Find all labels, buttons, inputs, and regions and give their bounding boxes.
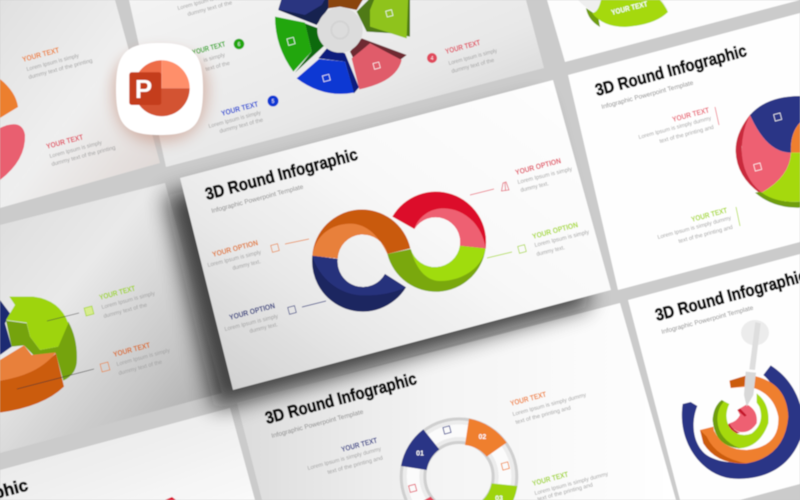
text: red label [638, 105, 719, 145]
text: orange label: Lorem Ipsum is simply [26, 53, 80, 73]
text: red label: Lorem Ipsum is simply dummy [638, 116, 712, 141]
text: red label: Lorem Ipsum is simply [49, 140, 103, 160]
chart: lime half disc [578, 0, 668, 27]
badge: red number [427, 53, 437, 63]
callout: orange option: Lorem Ipsum is simply [207, 250, 262, 269]
leader line: green [47, 313, 79, 321]
leader line: orange [17, 369, 94, 389]
badge: green number [234, 39, 244, 49]
text: navy label [307, 436, 384, 476]
icon: green [84, 306, 94, 316]
text: blue label: YOUR TEXT [220, 99, 260, 118]
callout: navy option [224, 301, 326, 335]
callout: orange option: YOUR OPTION [211, 238, 259, 259]
callout: navy option: dummy text. [249, 322, 279, 335]
text: red label: YOUR TEXT [45, 132, 85, 151]
text: orange label: YOUR TEXT [112, 340, 152, 359]
callout: lime option: dummy text. [536, 245, 566, 258]
text: red label right [444, 39, 497, 73]
chart: numbered donut [401, 419, 517, 500]
segment: navy [312, 256, 406, 312]
callout: lime option: YOUR OPTION [531, 220, 579, 241]
callout: red option: YOUR OPTION [514, 156, 562, 177]
panel: top right slide [547, 0, 800, 62]
text: orange label: text of the printing and [515, 405, 572, 426]
text: green label: text of the [205, 61, 231, 73]
icon: PowerPoint app: P [135, 74, 152, 104]
subtitle: Infographic Powerpoint Template [211, 183, 305, 215]
panel: top left slide [0, 0, 160, 208]
text: lime label [657, 206, 740, 245]
panel: top center slide [129, 0, 544, 167]
text: green label: Lorem Ipsum is simply [101, 291, 156, 311]
text: navy label: YOUR TEXT [340, 436, 379, 454]
title: 3D Round Infographic [203, 145, 360, 204]
chart: 3D pie [0, 297, 77, 413]
text: orange label: Lorem Ipsum is simply [116, 348, 171, 368]
chart: numbered donut: 02 [478, 434, 486, 441]
badge: blue number [268, 96, 278, 106]
panel: right lower slide [628, 254, 800, 500]
text: red label right: dummy text of the [451, 58, 495, 75]
text: green label: YOUR TEXT [191, 39, 227, 57]
chart: orange and red blobs [0, 79, 25, 180]
panel: main slide [180, 80, 611, 390]
callout: lime option: Lorem Ipsum is simply [534, 230, 590, 249]
callout: orange option [207, 238, 309, 272]
text: red label right: Lorem Ipsum is simply [448, 48, 498, 67]
text: orange label: YOUR TEXT [21, 45, 61, 64]
chart: 3D segmented wheel [275, 0, 410, 94]
chart: numbered donut: 01 [416, 451, 424, 458]
segment: red [392, 192, 486, 248]
callout: red option: dummy text. [520, 181, 550, 194]
panel: bottom left slide [0, 408, 255, 500]
title: 3D Round Infographic [263, 369, 419, 428]
text: orange label [112, 342, 170, 375]
text: red label [45, 132, 116, 168]
segment: orange [312, 210, 410, 258]
chart: infinity loop [312, 192, 486, 312]
text: navy label: text of the printing and [327, 455, 384, 476]
text: orange label: Lorem Ipsum is simply dummy [512, 392, 587, 418]
icon: orange [100, 362, 110, 372]
text: orange label [509, 390, 587, 426]
text: lime label: Lorem Ipsum is simply dummy [534, 471, 609, 497]
text: green label: is simply [203, 52, 226, 64]
text: orange label: dummy text of the printing [28, 58, 93, 81]
main slide shadow [165, 100, 590, 410]
text: green label: dummy text of the [103, 302, 148, 320]
text: cropped top copy: dummy text of the [187, 0, 233, 18]
subtitle: Infographic Powerpoint Template [661, 304, 755, 336]
text: blue label [208, 99, 264, 135]
text: blue label: dummy text of the [219, 117, 264, 135]
text: green label [98, 285, 154, 318]
badge: blue number: 5 [272, 99, 275, 105]
text: green label [192, 40, 230, 71]
callout: red option: Lorem Ipsum is simply [517, 167, 573, 186]
text: orange label [21, 45, 93, 81]
callout: orange option: dummy text. [232, 259, 262, 272]
text: red label: YOUR TEXT [671, 105, 711, 124]
text: lime label: YOUR TEXT [690, 206, 729, 224]
chart fragment: red tip [165, 497, 176, 500]
badge: red number: 4 [431, 56, 434, 62]
chart: concentric target with dart [682, 320, 800, 479]
callout: lime option [487, 220, 590, 258]
segment: green [387, 246, 486, 292]
text: orange label: dummy text of the [118, 359, 163, 377]
callout: navy option: YOUR OPTION [228, 301, 276, 322]
panel: left middle slide [0, 183, 222, 453]
text: orange label: YOUR TEXT [509, 390, 548, 408]
panel: bottom center slide [237, 303, 676, 500]
subtitle: Infographic Powerpoint Template [271, 408, 365, 440]
icon: PowerPoint app [113, 43, 208, 142]
background gutter [168, 183, 596, 414]
panel: right middle slide [568, 13, 800, 290]
callout: navy option: Lorem Ipsum is simply [224, 314, 279, 333]
text: red label: text of the printing and [659, 125, 715, 145]
callout: red option [470, 156, 573, 195]
text: red label right: YOUR TEXT [444, 38, 482, 56]
text: blue label: Lorem Ipsum is simply [208, 110, 262, 130]
chart: 3D round pie [736, 96, 800, 208]
text: lime label: text of the printing and [678, 225, 734, 245]
text: lime label: YOUR TEXT [531, 470, 570, 488]
badge: green number: 6 [238, 42, 241, 48]
text: navy label: Lorem Ipsum is simply dummy [307, 446, 382, 472]
text: lime label: Lorem Ipsum is simply dummy [657, 215, 732, 241]
title: 3D Round Infographic [593, 41, 749, 100]
subtitle: Infographic Powerpoint Template [601, 79, 695, 111]
text: red label: dummy text of the printing [51, 145, 116, 168]
text: green label: YOUR TEXT [98, 284, 137, 302]
